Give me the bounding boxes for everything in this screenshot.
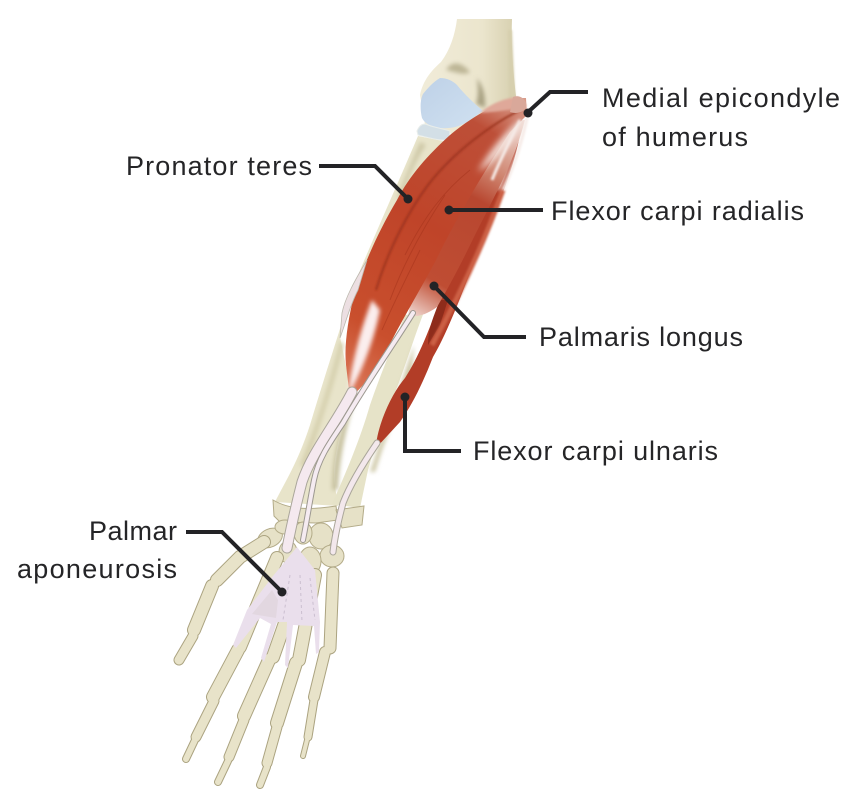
- label: medial epicondyle of humerus: of humerus: [602, 122, 748, 152]
- humerus: [420, 19, 516, 135]
- thumb: [179, 542, 264, 660]
- label: palmaris longus: Palmaris longus: [539, 322, 743, 352]
- label: palmar aponeurosis: Palmar: [89, 516, 177, 546]
- radial head: [417, 124, 450, 140]
- label: pronator teres: Pronator teres: [126, 151, 312, 181]
- hand bones: [179, 542, 333, 785]
- medial muscle origin highlight: [478, 118, 522, 172]
- flexor tendons to the wrist: [287, 313, 413, 552]
- carpal bones: [254, 500, 364, 575]
- ulna: [332, 312, 424, 508]
- articular cartilage: [421, 78, 483, 128]
- label: palmar aponeurosis: aponeurosis: [17, 554, 177, 584]
- ring finger: [260, 575, 315, 785]
- common flexor origin tendons: [492, 118, 527, 190]
- muscle fibres: [382, 170, 470, 330]
- flexor carpi ulnaris: [376, 118, 522, 448]
- little finger: [303, 573, 333, 756]
- flexor carpi radialis and pronator teres: [345, 97, 527, 398]
- leader lines: [186, 92, 588, 592]
- label: medial epicondyle of humerus: [602, 83, 840, 152]
- label: flexor carpi ulnaris: Flexor carpi ulnaris: [473, 436, 718, 466]
- central tendon highlight: [348, 300, 380, 395]
- medial epicondyle: [510, 96, 526, 113]
- label: medial epicondyle of humerus: Medial epicondyle: [602, 83, 840, 113]
- label: palmar aponeurosis: [17, 516, 177, 584]
- palmar aponeurosis: [233, 547, 320, 668]
- radius: [275, 124, 450, 506]
- pronator aponeurosis edge: [340, 260, 367, 338]
- index finger: [186, 558, 277, 759]
- label: flexor carpi radialis: Flexor carpi radialis: [551, 196, 804, 226]
- pronator teres edge: [376, 108, 524, 290]
- leader dots: [278, 108, 532, 596]
- middle finger: [218, 580, 300, 782]
- palmaris longus: [408, 120, 525, 316]
